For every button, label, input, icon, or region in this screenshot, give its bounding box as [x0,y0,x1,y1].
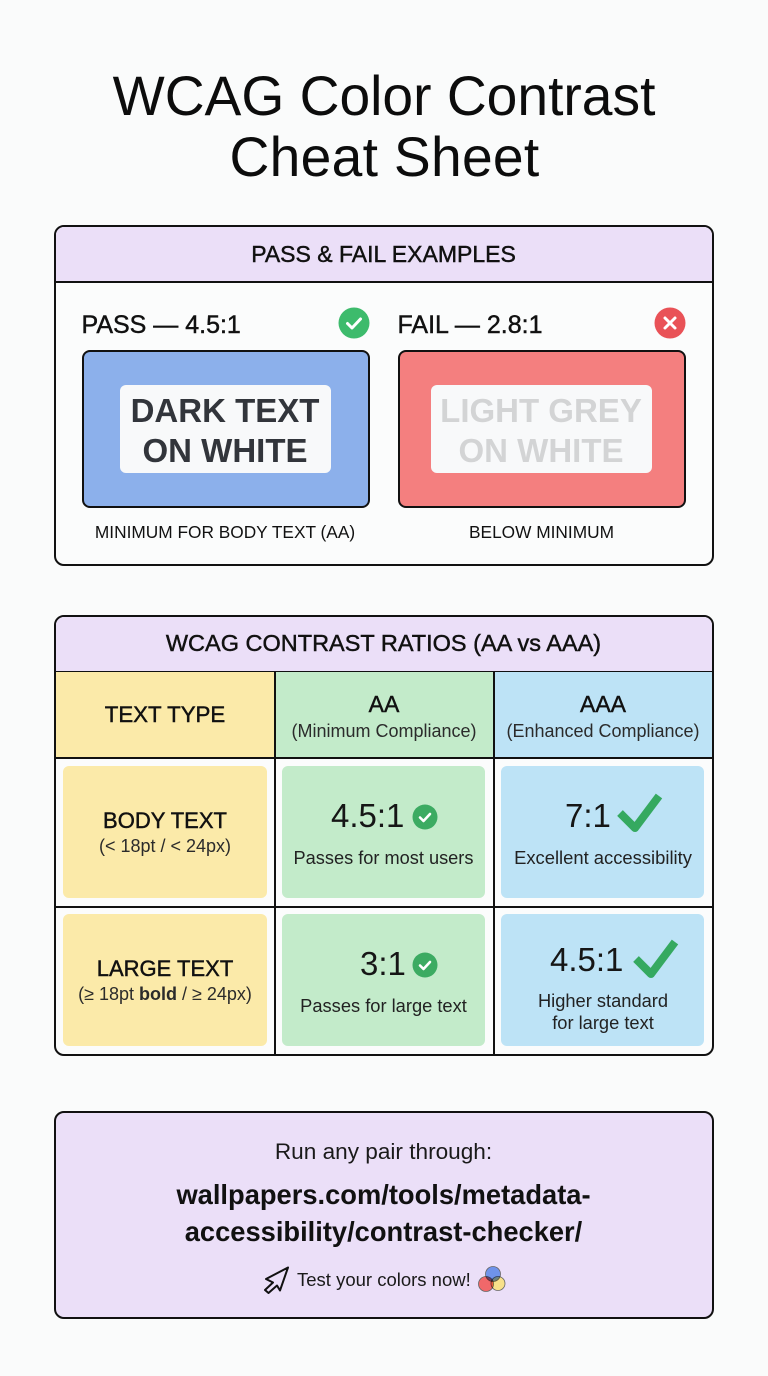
icon: large check [617,794,662,832]
panel: call to action [54,1111,714,1319]
column header: text type [56,672,274,758]
row label: body text: BODY TEXT [103,808,227,833]
column header: AA [274,672,493,758]
intro text: Run any pair through: [275,1139,492,1164]
fail label: FAIL — 2.8:1 [398,311,542,339]
icon: pass check [338,308,370,338]
sample text box: DARK TEXT [131,392,319,429]
row label: body text: (< 18pt / < 24px) [99,836,231,856]
icon: color wheel [478,1266,506,1292]
column header: AAA: AAA [580,691,626,717]
sample text box: LIGHT GREY [440,392,642,429]
note [538,990,668,1033]
row label: body text [63,766,267,898]
note: for large text [552,1012,654,1033]
column header: AA: (Minimum Compliance) [291,721,477,741]
column header: text type: TEXT TYPE [105,702,225,727]
ratio: 7:1 [565,797,611,834]
sample text box: ON WHITE [143,432,307,469]
note: Excellent accessibility [514,847,692,868]
sample text box [431,385,652,473]
note: Passes for most users [294,848,473,868]
note: Higher standard [538,990,668,1011]
heading: contrast ratios [56,617,712,673]
column header: AAA: (Enhanced Compliance) [506,721,700,741]
url: accessibility/contrast-checker/ [185,1216,582,1247]
row label: large text: (≥ 18pt bold / ≥ 24px) [78,984,252,1004]
ratio: 4.5:1 [331,797,404,834]
cell: AA large text [282,914,485,1046]
pass caption: MINIMUM FOR BODY TEXT (AA) [95,522,355,542]
icon: large check [633,940,678,978]
fail sample: light grey on white [398,350,686,508]
panel: contrast ratios table [54,615,714,1056]
icon: fail cross [654,308,686,338]
panel: pass and fail examples [54,225,714,566]
row label: large text: LARGE TEXT [97,956,233,981]
url: wallpapers.com/tools/metadata- [176,1179,591,1210]
column header: AAA [493,672,712,758]
cell: AA body text [282,766,485,898]
title: WCAG Color Contrast [113,65,655,127]
heading: pass and fail examples [56,227,712,283]
url [176,1179,591,1247]
ratio: 3:1 [360,945,406,982]
sample text box: ON WHITE [459,432,623,469]
heading: pass and fail examples: PASS & FAIL EXAMPLES [251,241,516,267]
note: Passes for large text [300,995,467,1016]
column header: AA: AA [369,691,399,717]
heading: contrast ratios: WCAG CONTRAST RATIOS (AA vs AAA) [166,630,601,656]
row label: large text [63,914,267,1046]
icon: check badge [412,952,438,978]
ratio: 4.5:1 [550,941,623,978]
fail caption: BELOW MINIMUM [469,522,614,542]
title [112,65,656,188]
pass label: PASS — 4.5:1 [82,311,241,339]
pass sample: dark text on white [82,350,370,508]
call to action text: Test your colors now! [297,1269,471,1290]
icon: cursor arrow [264,1266,289,1294]
icon: check badge [412,804,438,830]
title: Cheat Sheet [229,126,540,188]
cell: AAA body text [501,766,704,898]
cell: AAA large text [501,914,704,1046]
sample text box [120,385,331,473]
